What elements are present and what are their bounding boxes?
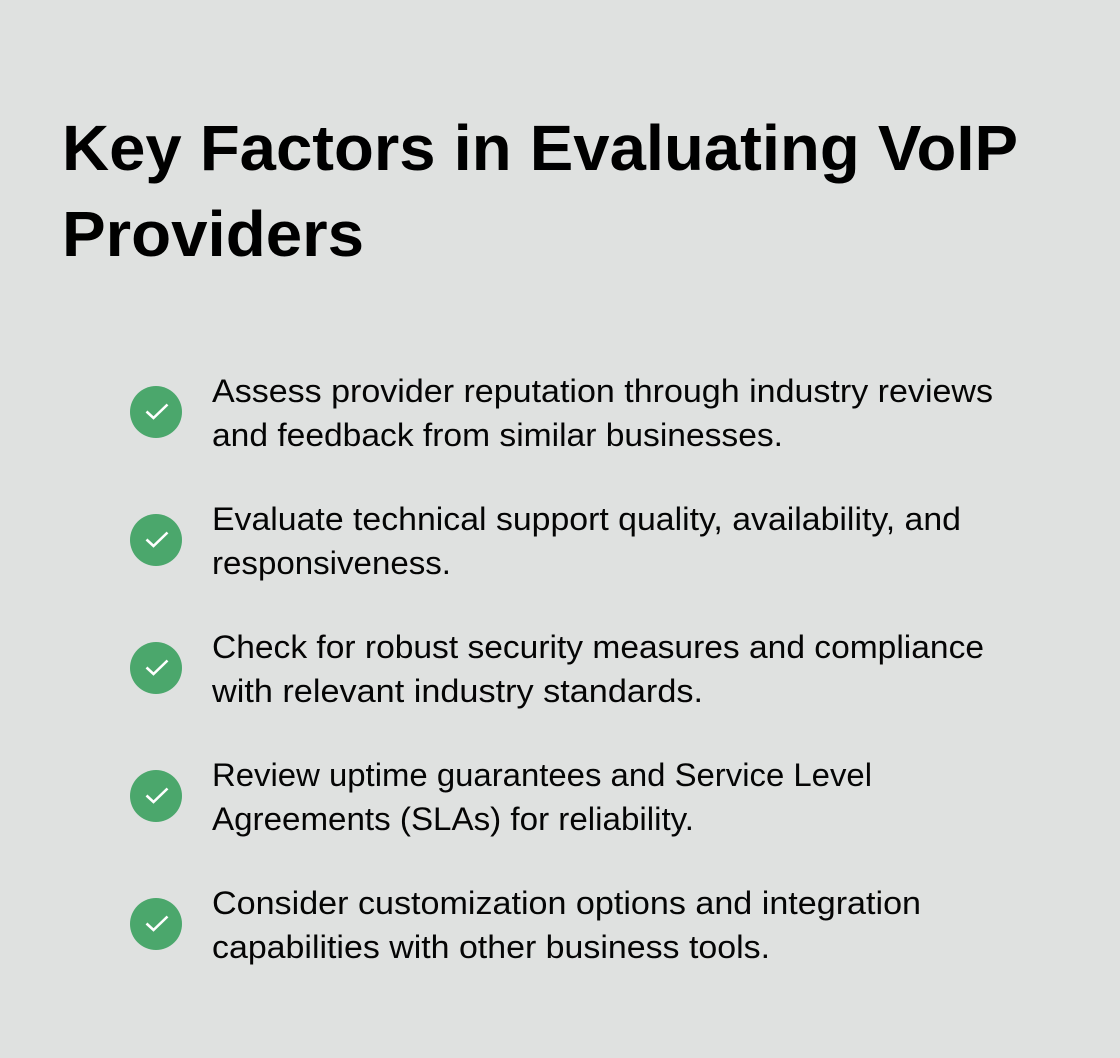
item 3 <box>130 629 984 709</box>
title <box>62 112 1018 270</box>
text: technical support: Evaluate technical support quality, availability, and <box>212 501 961 537</box>
text: reputation: Assess provider reputation through industry reviews <box>212 373 993 409</box>
text: security: with relevant industry standards. <box>211 673 703 709</box>
text: customization: capabilities with other business tools. <box>212 929 770 965</box>
text: uptime: Agreements (SLAs) for reliability. <box>212 801 694 837</box>
icon: green check circle <box>130 898 182 950</box>
text: security <box>211 629 984 709</box>
text: technical support <box>212 501 961 581</box>
item 2 <box>130 501 961 581</box>
icon: green check circle <box>130 386 182 438</box>
item 4 <box>130 757 872 837</box>
item 1 <box>130 373 993 453</box>
checklist <box>130 373 993 965</box>
text: reputation <box>212 373 993 453</box>
text: customization <box>212 885 921 965</box>
text: uptime <box>212 757 872 837</box>
text: uptime: Review uptime guarantees and Service Level <box>212 757 872 793</box>
text: reputation: and feedback from similar businesses. <box>212 417 783 453</box>
title: Providers <box>62 198 364 270</box>
text: security: Check for robust security measures and compliance <box>212 629 984 665</box>
text: customization: Consider customization options and integration <box>212 885 921 921</box>
title: Key Factors in Evaluating VoIP <box>62 112 1018 184</box>
icon: green check circle <box>130 770 182 822</box>
icon: green check circle <box>130 642 182 694</box>
text: technical support: responsiveness. <box>212 545 451 581</box>
icon: green check circle <box>130 514 182 566</box>
item 5 <box>130 885 921 965</box>
